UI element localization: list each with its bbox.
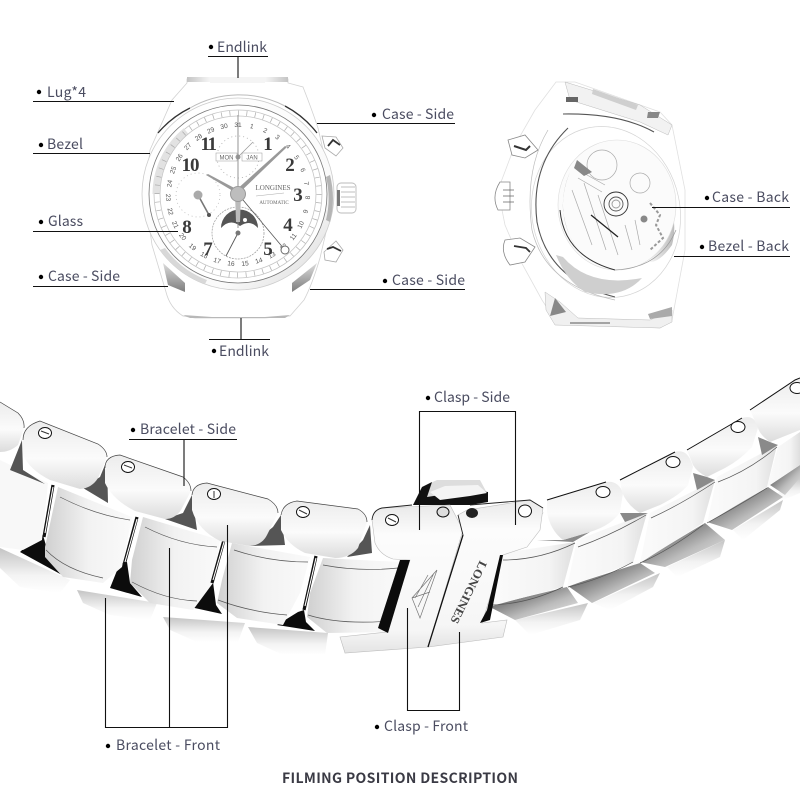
label: bezel back: Bezel - Back bbox=[708, 236, 789, 256]
brand text on dial: AUTOMATIC bbox=[259, 201, 289, 206]
date ring: 30 bbox=[220, 123, 229, 131]
clasp LONGINES engraving: LONGINES bbox=[447, 559, 490, 626]
top subdial with day and month windows bbox=[216, 136, 262, 178]
label: case side right top: Case - Side bbox=[382, 104, 454, 124]
date ring: 12 bbox=[279, 242, 289, 253]
dark gaps between links left bbox=[20, 535, 315, 631]
hour numerals: 8 bbox=[182, 217, 192, 238]
label: glass: Glass bbox=[48, 211, 83, 231]
dial bbox=[149, 105, 327, 283]
title: FILMING POSITION DESCRIPTION bbox=[282, 768, 518, 788]
top links right bbox=[547, 378, 800, 540]
middle links left bbox=[0, 460, 400, 633]
date ring: 11 bbox=[289, 232, 299, 242]
date ring: 4 bbox=[284, 143, 292, 151]
label: clasp front: Clasp - Front bbox=[384, 716, 469, 736]
label: bracelet side: Bracelet - Side bbox=[140, 419, 236, 439]
top links left outlines bbox=[0, 402, 367, 522]
hour numerals: 7 bbox=[203, 239, 213, 260]
hour numerals: 4 bbox=[283, 215, 293, 236]
date ring: 27 bbox=[183, 142, 194, 152]
label: top endlink: Endlink bbox=[217, 37, 267, 57]
hour numerals: 10 bbox=[182, 155, 199, 176]
label: top endlink bbox=[208, 37, 268, 78]
top links right outlines bbox=[547, 378, 800, 500]
slits between links bbox=[44, 485, 316, 610]
top endlink bbox=[187, 77, 288, 83]
label: lug: Lug*4 bbox=[47, 82, 86, 102]
clasp buckle bbox=[413, 480, 488, 505]
hour numerals bbox=[182, 134, 303, 260]
back pushers and crown bbox=[495, 135, 538, 265]
bracelet pin screws bbox=[38, 382, 800, 526]
crown bbox=[337, 183, 356, 213]
date ring: 22 bbox=[165, 207, 174, 216]
brand text on dial bbox=[256, 184, 291, 206]
link ridge lines bbox=[46, 447, 777, 622]
bottom lug details bbox=[545, 292, 672, 328]
date ring: 13 bbox=[267, 251, 277, 261]
front watch illustration bbox=[142, 77, 356, 318]
minute track bbox=[157, 113, 319, 275]
left subdial bbox=[176, 173, 220, 217]
shadows beneath top links left bbox=[10, 440, 372, 557]
date ring: 26 bbox=[175, 153, 185, 163]
date ring: 31 bbox=[234, 122, 242, 129]
label: bracelet front bbox=[106, 525, 228, 755]
clasp edge lines bbox=[372, 500, 543, 535]
watch hands bbox=[206, 115, 289, 254]
label: bezel back bbox=[674, 236, 790, 256]
top links left bbox=[0, 402, 367, 558]
label: bezel: Bezel bbox=[47, 134, 83, 154]
hour numerals: 5 bbox=[263, 239, 273, 260]
date ring: 25 bbox=[169, 165, 178, 175]
date ring bbox=[164, 122, 312, 268]
back watch illustration bbox=[495, 82, 696, 328]
date ring: 2 bbox=[262, 127, 268, 135]
date ring: 21 bbox=[170, 220, 180, 230]
hour numerals: 11 bbox=[201, 134, 216, 155]
bezel bbox=[142, 98, 334, 290]
date ring: 6 bbox=[298, 167, 306, 173]
date ring: 1 bbox=[249, 123, 255, 131]
back case outline bbox=[498, 82, 685, 328]
label: clasp side bbox=[420, 387, 516, 530]
label: clasp front bbox=[375, 608, 469, 736]
label: case back bbox=[652, 187, 790, 208]
label: bottom endlink: Endlink bbox=[219, 341, 269, 361]
label: case side left bbox=[33, 266, 168, 286]
date ring: 20 bbox=[177, 232, 187, 242]
date ring: 17 bbox=[212, 257, 222, 266]
date ring: 16 bbox=[227, 260, 235, 268]
label: case side right bottom bbox=[310, 270, 465, 290]
date ring: 9 bbox=[302, 209, 310, 214]
date ring: 7 bbox=[302, 181, 309, 186]
hour numerals: 1 bbox=[263, 134, 273, 155]
top subdial with day and month windows: JAN bbox=[246, 156, 258, 162]
middle links right bbox=[488, 432, 800, 607]
moon phase subdial bbox=[212, 207, 264, 259]
date ring: 10 bbox=[297, 220, 306, 230]
hour numerals: 2 bbox=[285, 155, 295, 176]
bottom links row bbox=[0, 477, 800, 655]
clasp black slit left bbox=[378, 560, 410, 633]
date ring: 8 bbox=[305, 195, 312, 200]
hour numerals: 3 bbox=[293, 185, 303, 206]
case back bezel bbox=[516, 112, 696, 312]
label: bracelet side bbox=[129, 419, 237, 486]
date ring: 14 bbox=[255, 257, 264, 266]
watch case and lugs bbox=[145, 79, 330, 318]
label: case side right bottom: Case - Side bbox=[392, 270, 465, 290]
clasp right part bbox=[428, 500, 543, 647]
date ring: 5 bbox=[292, 154, 300, 161]
date ring: 24 bbox=[166, 179, 174, 188]
date ring: 28 bbox=[194, 133, 204, 143]
label: glass bbox=[33, 211, 178, 232]
date ring: 3 bbox=[274, 134, 281, 142]
label: bezel bbox=[33, 134, 150, 154]
pusher bottom bbox=[324, 241, 343, 262]
label: case back: Case - Back bbox=[712, 187, 789, 207]
clasp left part bbox=[340, 505, 463, 653]
date ring: 23 bbox=[164, 194, 171, 202]
exhibition window and movement bbox=[558, 140, 676, 270]
label: case side right top bbox=[317, 104, 455, 124]
label: bottom endlink bbox=[209, 318, 270, 361]
bracelet bbox=[0, 378, 800, 655]
clasp black slit right bbox=[480, 555, 503, 623]
clasp winged hourglass logo bbox=[412, 570, 437, 618]
brand text on dial: LONGINES bbox=[256, 184, 291, 192]
top lug details bbox=[563, 82, 672, 135]
clasp seam bbox=[428, 535, 463, 647]
label: case side left: Case - Side bbox=[48, 266, 120, 286]
shaded tachymeter arc bbox=[156, 131, 186, 194]
date ring: 19 bbox=[187, 242, 197, 253]
date ring: 15 bbox=[241, 260, 249, 268]
label: bracelet front: Bracelet - Front bbox=[116, 735, 221, 755]
shadows beneath top links right bbox=[537, 437, 778, 542]
label: clasp side: Clasp - Side bbox=[434, 387, 510, 407]
pusher top bbox=[322, 136, 343, 156]
label: lug bbox=[33, 82, 174, 102]
date ring: 18 bbox=[199, 251, 209, 261]
top subdial with day and month windows: MON bbox=[220, 156, 234, 162]
bottom endlink bbox=[183, 315, 290, 318]
date ring: 29 bbox=[206, 126, 216, 136]
dark gaps between links right bbox=[488, 465, 800, 620]
